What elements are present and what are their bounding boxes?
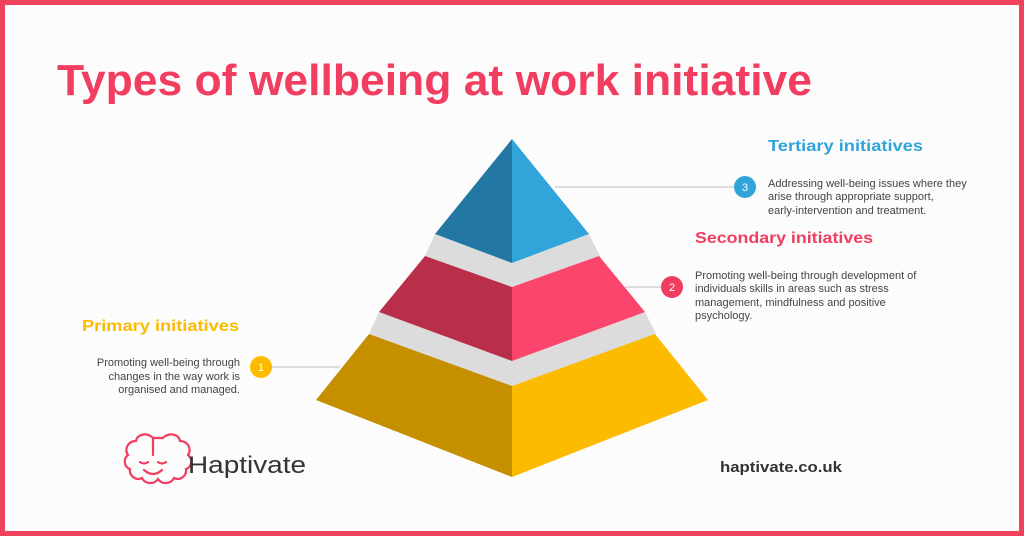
website url: haptivate.co.uk bbox=[720, 459, 843, 476]
primary text: changes in the way work is bbox=[109, 371, 240, 383]
tertiary text bbox=[768, 178, 967, 217]
tertiary text: arise through appropriate support, bbox=[768, 191, 934, 203]
marker 2: 2 bbox=[669, 282, 675, 294]
secondary text: management, mindfulness and positive bbox=[695, 297, 886, 309]
connector lines bbox=[270, 187, 735, 367]
logo icon: brain bbox=[125, 434, 191, 483]
secondary text bbox=[695, 270, 917, 322]
tertiary heading: Tertiary initiatives bbox=[768, 138, 923, 155]
tertiary text: early-intervention and treatment. bbox=[768, 205, 926, 217]
marker 3 bbox=[734, 176, 756, 198]
secondary text: Promoting well-being through development of bbox=[695, 270, 917, 282]
marker 1: 1 bbox=[258, 362, 264, 374]
marker 3: 3 bbox=[742, 182, 748, 194]
primary text bbox=[97, 357, 240, 396]
primary text: Promoting well-being through bbox=[97, 357, 240, 369]
pyramid bbox=[316, 139, 708, 477]
secondary text: psychology. bbox=[695, 310, 752, 322]
marker 1 bbox=[250, 356, 272, 378]
logo text: Haptivate bbox=[188, 452, 306, 479]
primary heading: Primary initiatives bbox=[82, 318, 239, 335]
primary text: organised and managed. bbox=[118, 384, 240, 396]
pyramid tier: tertiary (blue) bbox=[435, 139, 589, 263]
marker 2 bbox=[661, 276, 683, 298]
secondary heading: Secondary initiatives bbox=[695, 230, 873, 247]
secondary text: individuals skills in areas such as stress bbox=[695, 283, 889, 295]
pyramid tier: secondary (pink) bbox=[379, 256, 645, 361]
pyramid tier: primary (yellow) bbox=[316, 334, 708, 477]
tertiary text: Addressing well-being issues where they bbox=[768, 178, 967, 190]
title: Types of wellbeing at work initiative bbox=[57, 56, 812, 105]
